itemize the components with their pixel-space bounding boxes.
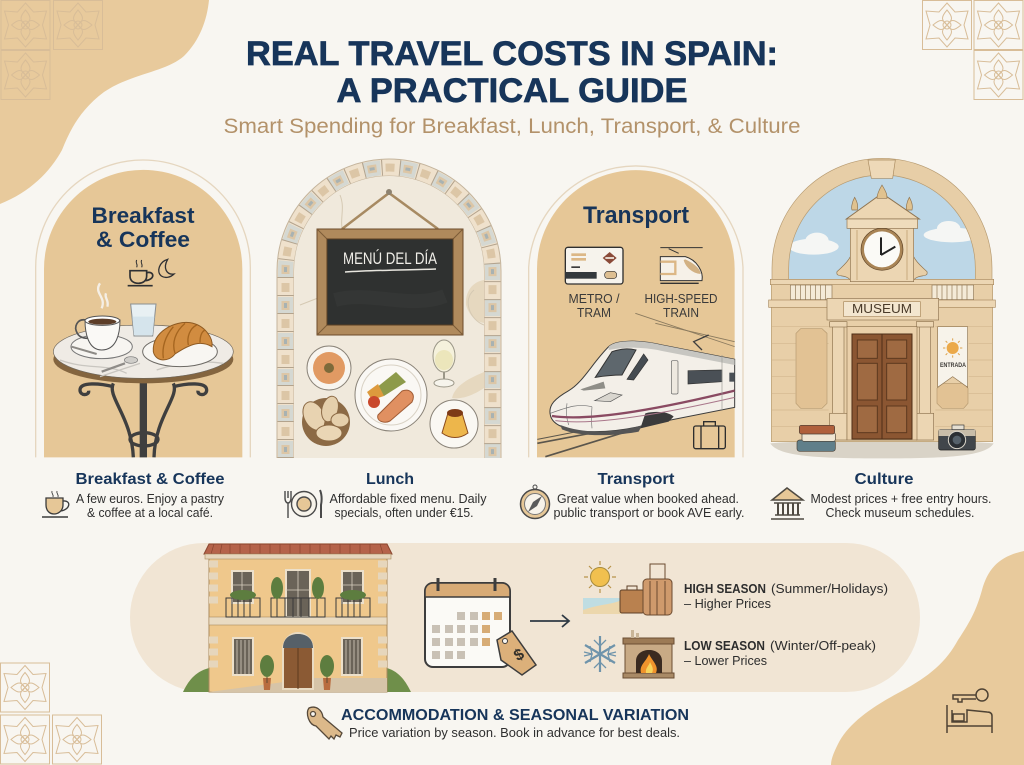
icon: high speed train [660,248,703,283]
text block: breakfast and coffee [76,471,225,520]
subtitle: Smart Spending for Breakfast, Lunch, Transport, & Culture [224,115,801,138]
balustrades [790,285,974,300]
wall panels [796,329,968,408]
label: metro tram [568,292,620,320]
tile pattern: bottom left [0,663,102,764]
panel: lunch arch [286,168,492,458]
nail [386,189,392,195]
illustration: spoon bowl [124,357,138,363]
label: metro tram: METRO / [568,292,620,306]
illustration: main plate [355,359,427,431]
illustration: soup bowl [307,346,351,390]
illustration: cafe table [53,325,233,457]
label: high-speed train: TRAIN [663,306,699,320]
text: high season: HIGH SEASON [684,582,766,596]
title: REAL TRAVEL COSTS IN SPAIN: [246,35,778,73]
illustration: flan [430,400,478,448]
icon: plate and cutlery [285,490,322,518]
text block: breakfast and coffee: & coffee at a local café. [87,506,213,520]
icon: snowflake and fireplace [584,630,674,678]
label: metro tram: TRAM [577,306,611,320]
icon: coffee cup [42,491,69,517]
clouds [789,221,980,255]
text: high season: – Higher Prices [684,597,771,611]
text block: culture: Culture [854,471,914,488]
panel heading: breakfast: Breakfast [92,203,195,228]
text: low season: – Lower Prices [684,654,767,668]
illustration: bread basket [299,394,350,446]
stone arch fill [780,167,984,283]
panel heading: breakfast: & Coffee [96,227,190,252]
museum sign [827,298,939,320]
decorative blob: top left [0,0,209,204]
text block: lunch: Lunch [366,471,414,488]
illustration: rail tracks [537,398,735,457]
text block: transport: public transport or book AVE early. [554,506,744,520]
text block: culture: Check museum schedules. [826,506,974,520]
chalkboard: MENÚ DEL DÍA [343,249,438,268]
label: entrada: ENTRADA [940,363,967,369]
panel heading: transport: Transport [583,202,689,229]
tile pattern: top right [922,0,1023,100]
title [246,35,778,110]
panel: culture museum [769,160,995,458]
ground [770,440,994,458]
icon: suitcase [694,422,725,449]
text: high season [684,582,888,611]
illustration: high-speed train [550,341,735,435]
icon: sun and beach with luggage [583,561,672,615]
icon: compass [520,485,550,518]
illustration: calendar with price tag [425,578,536,675]
text block: lunch: specials, often under €15. [334,506,474,520]
text block: breakfast and coffee: Breakfast & Coffee [76,471,225,488]
icon: temple [771,488,804,519]
text: low season: LOW SEASON [684,639,765,653]
text: low season: (Winter/Off-peak) [770,639,876,653]
panel heading: breakfast [92,203,195,252]
banner [938,327,968,387]
text block: lunch [330,471,487,520]
rope [342,193,438,229]
arrow [530,615,569,627]
illustration: croissant plate [143,322,217,367]
illustration: calendar with price tag: $ [511,646,527,665]
decorative blob: bottom right [831,551,1024,765]
illustration: wine glass [433,340,455,387]
text block: lunch: Affordable fixed menu. Daily [330,492,487,506]
text: low season [684,639,876,668]
sky [789,175,975,283]
illustration: spoon [102,363,125,372]
icon: cup and moon [128,259,174,286]
text block: breakfast and coffee: A few euros. Enjoy a pastry [76,492,225,506]
illustration: books [797,425,835,451]
text block: culture [810,471,992,520]
text block: transport [554,471,744,520]
panel: accommodation pill [130,543,920,692]
wooden door [847,327,917,440]
illustration: water glass [131,304,156,336]
text block: transport: Transport [598,471,675,488]
label: high-speed train [644,292,718,320]
icon: key [307,707,342,739]
wall stains [452,280,484,398]
tile arch border [286,168,492,458]
building walls [769,279,995,442]
illustration: hotel building [183,544,411,692]
tile pattern: top left [1,0,102,100]
chalkboard [317,229,463,335]
clock tower [837,185,927,282]
illustration: camera [939,425,975,450]
panel: transport arch [529,166,743,457]
section title and note [341,707,689,740]
columns [830,322,934,440]
icon: key and bed [947,689,992,733]
panel: breakfast arch [36,160,250,457]
text: high season: (Summer/Holidays) [771,582,888,596]
overhead wires and pantograph [635,313,735,350]
section title and note: Price variation by season. Book in advance for best deals. [349,725,680,740]
label: high-speed train: HIGH-SPEED [644,292,718,306]
illustration: coffee cup [71,283,132,359]
wall cracks [300,195,484,325]
keystone [868,160,895,178]
text block: culture: Modest prices + free entry hours. [810,492,992,506]
label: museum: MUSEUM [852,302,912,316]
text block: transport: Great value when booked ahead. [557,492,739,506]
section title and note: ACCOMMODATION & SEASONAL VARIATION [341,707,689,724]
title: A PRACTICAL GUIDE [336,72,688,110]
plaster wall [294,176,484,458]
stone arch [780,167,984,283]
icon: metro card [565,247,623,284]
